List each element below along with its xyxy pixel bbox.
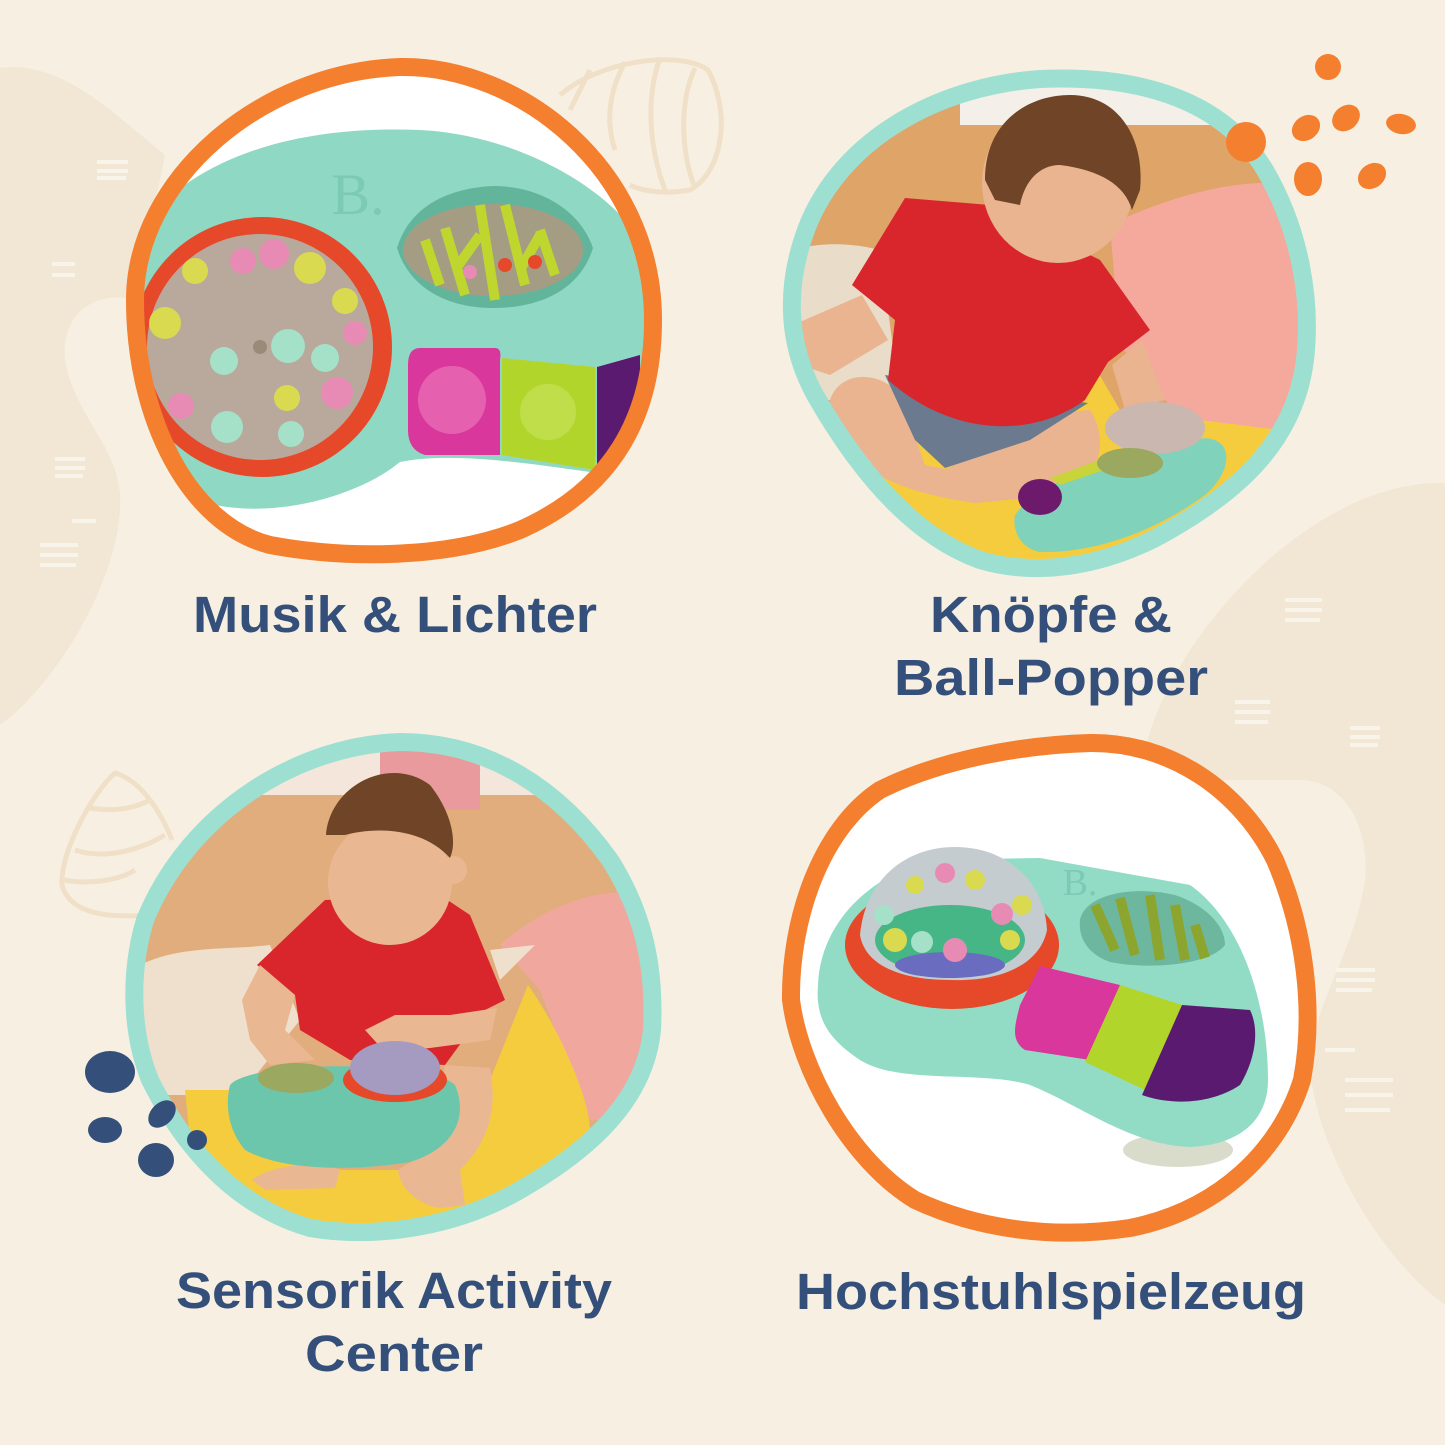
panel: Knöpfe & Ball-Popper bbox=[780, 70, 1320, 580]
knit pillow bbox=[140, 945, 300, 1095]
toy close-up body bbox=[130, 129, 660, 509]
panel: Musik & Lichter bbox=[120, 50, 670, 570]
decorative sketch: left of panel 3 bbox=[62, 773, 172, 916]
decorative sketch: top right of panel 1 bbox=[560, 58, 721, 192]
panel outline bbox=[791, 743, 1308, 1233]
dome bbox=[845, 847, 1059, 1009]
buttons bbox=[408, 348, 640, 470]
large ball dome bbox=[132, 217, 392, 477]
cushion pink bbox=[1111, 183, 1298, 429]
baby bbox=[800, 95, 1165, 503]
heading: Sensorik Activity Center bbox=[176, 1262, 613, 1382]
toy logo: B. bbox=[331, 162, 385, 227]
yellow blanket bbox=[884, 376, 1272, 560]
panel outline bbox=[135, 67, 653, 554]
spring window bbox=[397, 186, 593, 308]
cushion knit bbox=[800, 244, 892, 400]
toy logo: B. bbox=[1063, 862, 1097, 904]
pillow pink bbox=[500, 892, 644, 1120]
icon: orange dots bbox=[1226, 54, 1418, 196]
toy bbox=[228, 1041, 460, 1168]
buttons bbox=[1015, 966, 1255, 1102]
heading: Knöpfe & Ball-Popper: Ball-Popper bbox=[894, 649, 1208, 706]
heading: Sensorik Activity Center: Sensorik Activity bbox=[176, 1262, 613, 1319]
suction cup bbox=[1123, 1138, 1233, 1167]
spring window bbox=[1080, 891, 1225, 966]
heading: Knöpfe & Ball-Popper: Knöpfe & bbox=[930, 586, 1172, 643]
toy bbox=[1014, 402, 1226, 552]
icon: navy dots bbox=[85, 1051, 207, 1177]
decorative dashes bbox=[40, 162, 1393, 1110]
panel: Hochstuhlspielzeug bbox=[782, 733, 1318, 1243]
heading: Musik & Lichter: Musik & Lichter bbox=[193, 586, 597, 643]
toy body bbox=[818, 858, 1268, 1147]
panel: Sensorik Activity Center bbox=[126, 733, 662, 1243]
blanket bbox=[185, 985, 590, 1224]
baby bbox=[242, 773, 505, 1208]
panel outline bbox=[792, 79, 1307, 568]
heading: Hochstuhlspielzeug: Hochstuhlspielzeug bbox=[796, 1263, 1306, 1320]
heading: Sensorik Activity Center: Center bbox=[305, 1325, 483, 1382]
panel outline bbox=[134, 742, 653, 1232]
heading: Knöpfe & Ball-Popper bbox=[894, 586, 1208, 706]
